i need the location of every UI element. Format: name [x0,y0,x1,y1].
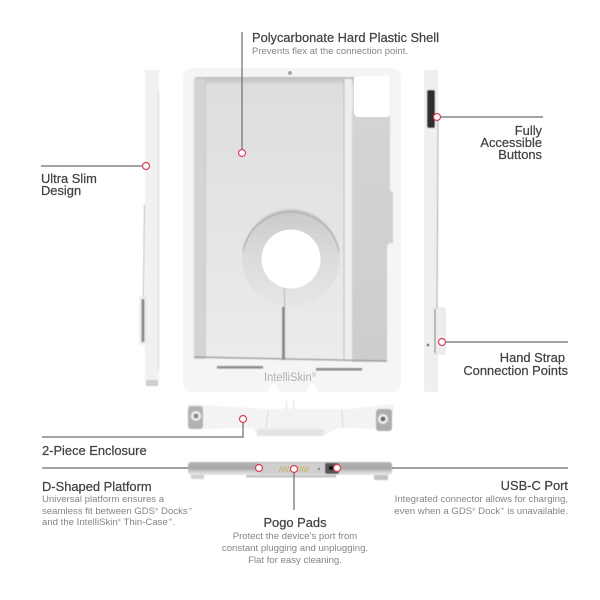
callout: D-shaped platform: ™ [188,507,192,512]
callout: 2-piece enclosure [42,416,246,458]
callout: pogo pads: Flat for easy cleaning. [248,555,342,566]
callout: USB-C port: even when a GDS [394,506,472,517]
callout: fully accessible buttons: Fully [515,123,543,138]
callout: hand strap connection points: Hand Strap [500,350,565,365]
callout: hand strap connection points: Connection Points [463,363,568,378]
callout: D-shaped platform: . [172,517,175,528]
callout: pogo pads: Pogo Pads [263,515,327,530]
callout: D-shaped platform: ™ [168,518,172,523]
bottom notches [266,384,319,392]
heading: polycarbonate hard plastic shell: Polycarbonate Hard Plastic Shell [252,30,439,45]
callout: ultra slim design: Ultra Slim [41,171,97,186]
right side view of case [424,70,445,392]
callout: D-shaped platform: seamless fit between GDS [42,506,155,517]
callout: USB-C port: Dock [476,506,500,517]
callout: ultra slim design [41,162,150,198]
left side view of case [140,70,159,386]
callout: D-shaped platform: Thin-Case [121,517,168,528]
2-piece enclosure part [188,401,394,436]
callout: USB-C port [334,464,568,517]
polycarbonate shell back view [183,68,401,392]
callout: D-shaped platform [42,464,262,528]
callout: pogo pads [222,466,368,566]
callout: USB-C port: ® [472,506,476,512]
callout: fully accessible buttons: Buttons [498,147,542,162]
callout: D-shaped platform: ® [118,517,122,523]
callout: ultra slim design: Design [41,183,81,198]
callout: polycarbonate shell line [238,32,246,156]
callout: pogo pads: constant plugging and unplugging. [222,543,368,554]
IntelliSkin logo: IntelliSkin [264,372,313,384]
callout: hand strap connection points [438,338,568,378]
callout: USB-C port: Integrated connector allows for charging, [395,494,568,505]
callout: USB-C port: USB-C Port [501,478,568,493]
callout: USB-C port: is unavailable. [505,506,568,517]
center hole [262,230,320,288]
top notch [288,71,292,75]
callout: D-shaped platform: Universal platform ensures a [42,494,165,505]
callout: fully accessible buttons [434,114,543,162]
callout: pogo pads: Protect the device’s port from [233,531,357,542]
callout: D-shaped platform: ® [155,506,159,512]
IntelliSkin logo: ® [312,372,317,379]
D-shaped platform and port bar [188,462,392,480]
callout: D-shaped platform: Docks [158,506,188,517]
heading: polycarbonate hard plastic shell: Prevents flex at the connection point. [252,46,408,57]
callout: D-shaped platform: D-Shaped Platform [42,479,152,494]
heading: polycarbonate hard plastic shell [252,30,439,57]
callout: USB-C port: ™ [500,507,505,512]
callout: D-shaped platform: and the IntelliSkin [42,517,118,528]
callout: 2-piece enclosure: 2-Piece Enclosure [42,443,147,458]
pogo contacts: //////////// [279,465,310,474]
callout: fully accessible buttons: Accessible [480,135,542,150]
camera cutout [354,76,390,117]
